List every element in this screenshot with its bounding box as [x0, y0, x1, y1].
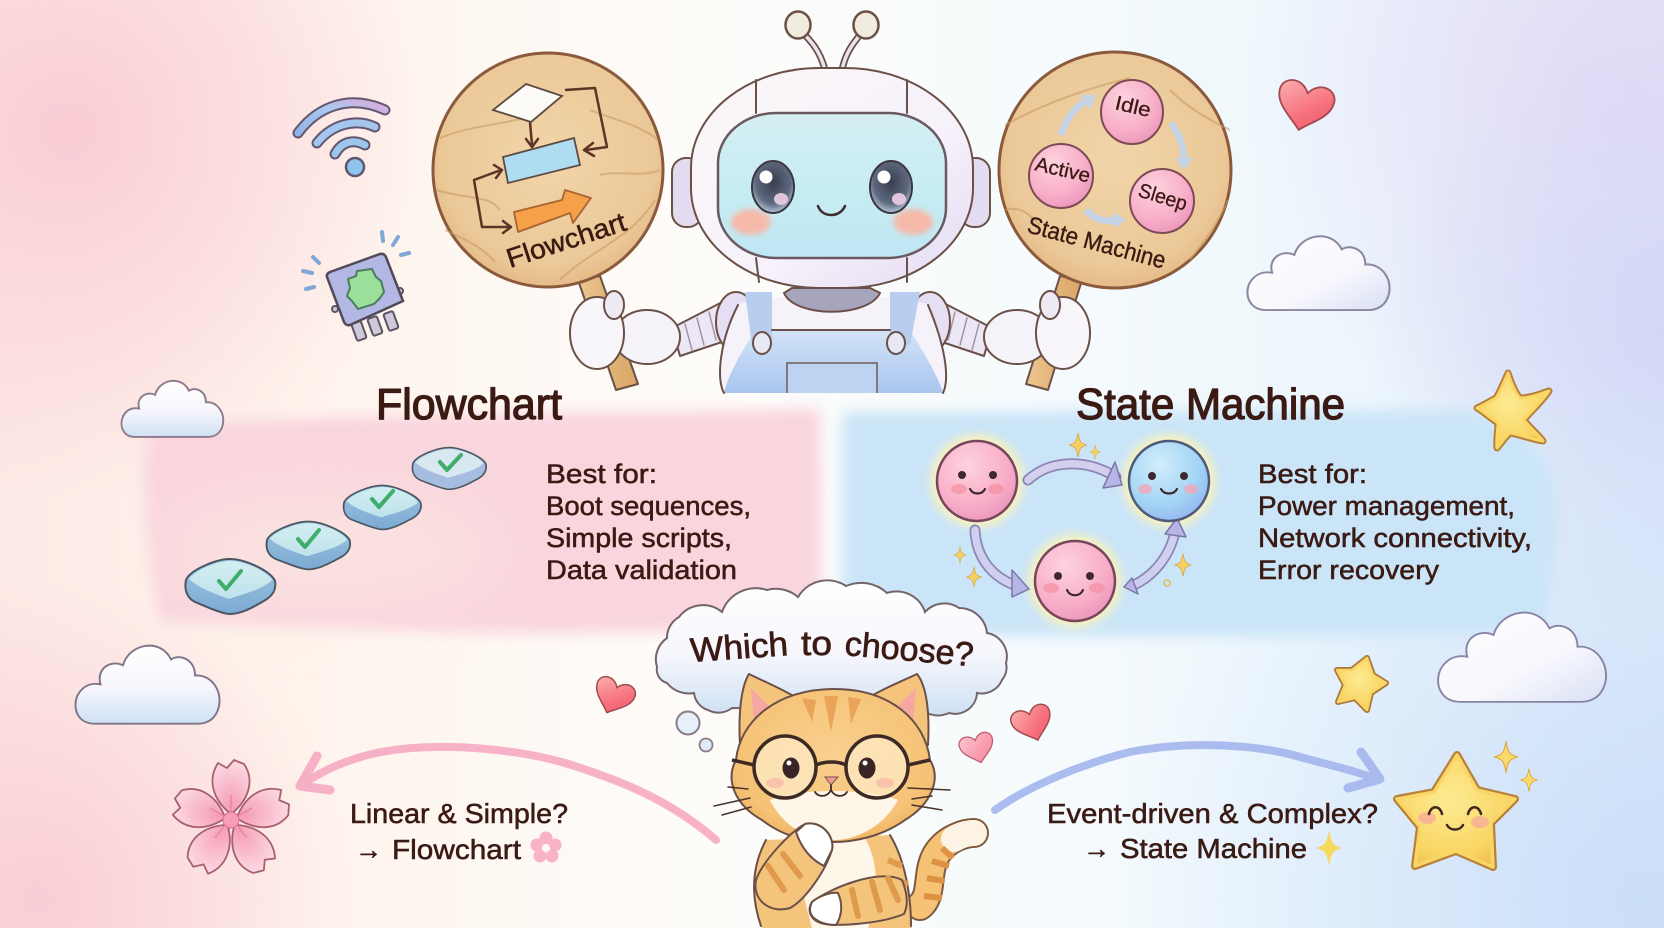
cloud left lower	[75, 646, 219, 724]
heading: state machine: State Machine	[1076, 380, 1345, 429]
state face pink 1	[937, 441, 1017, 521]
text: event driven	[1047, 798, 1378, 864]
icon: antennae	[786, 12, 878, 70]
cloud left middle	[121, 381, 223, 437]
text: event driven: Event-driven & Complex?	[1047, 798, 1378, 829]
text: flowchart best for: Best for:	[546, 459, 657, 489]
step 2	[267, 522, 350, 569]
flow diagram	[474, 84, 607, 233]
transition arrows	[975, 464, 1175, 587]
panel: state machine background	[842, 410, 1555, 637]
state diagram	[931, 433, 1215, 627]
text: event driven: →	[1083, 833, 1110, 864]
left arm and stick	[570, 276, 756, 390]
icon: big star top right	[1477, 373, 1549, 448]
text: event driven: State Machine	[1120, 833, 1307, 864]
heading: flowchart: Flowchart	[376, 380, 562, 429]
text: linear and simple: →	[355, 834, 382, 865]
cat muzzle	[770, 791, 898, 840]
cat	[714, 674, 974, 928]
sign: state machine: Active	[1033, 153, 1092, 187]
text: flowchart best for: Data validation	[546, 555, 737, 585]
cat paw raised	[755, 823, 832, 909]
icon: cherry blossom	[168, 760, 294, 879]
whiskers	[714, 787, 950, 815]
cloud right lower	[1438, 613, 1606, 702]
flowchart steps	[185, 447, 486, 614]
bubble text: to	[801, 625, 832, 663]
sign: flowchart	[433, 53, 663, 287]
right arm and stick	[910, 276, 1090, 390]
text: state machine best for: Best for:	[1258, 459, 1367, 489]
state labels: Idle	[1113, 92, 1153, 122]
helmet seams	[756, 80, 907, 282]
panel: flowchart background	[145, 409, 822, 633]
icon: small flower	[530, 832, 562, 862]
state face blue	[1129, 441, 1209, 521]
cat head	[732, 689, 935, 842]
sign label: Flowchart	[503, 207, 630, 274]
step 4	[412, 447, 486, 489]
robot	[570, 12, 1090, 393]
icon: microchip	[303, 232, 409, 341]
icon: small star	[1337, 658, 1386, 710]
face screen	[718, 113, 946, 258]
thought bubble	[656, 580, 1007, 752]
arrow: to flowchart	[300, 747, 716, 840]
cat tail	[920, 833, 974, 906]
cat body	[754, 835, 912, 928]
sparkles	[954, 433, 1192, 587]
text: flowchart best for: Simple scripts,	[546, 523, 732, 553]
icon: pink heart	[957, 731, 998, 767]
nose and mouth	[815, 777, 847, 796]
cat ears	[739, 674, 929, 745]
robot body with overalls	[720, 288, 946, 393]
sign: state machine: Sleep	[1136, 180, 1190, 215]
text: linear and simple: Linear & Simple?	[350, 798, 568, 829]
icon: left heart	[588, 674, 638, 720]
text: linear and simple	[350, 798, 568, 865]
text: state machine best for: Network connectivity,	[1258, 523, 1532, 553]
text: flowchart best for	[546, 459, 751, 585]
icon: inline sparkle	[1316, 830, 1342, 866]
text: state machine best for	[1258, 459, 1532, 585]
cloud top right	[1247, 236, 1389, 310]
icon: right heart	[1008, 702, 1057, 746]
icon: heart top right	[1271, 77, 1337, 137]
cat head stripes	[802, 696, 861, 732]
text: linear and simple: Flowchart	[392, 834, 521, 865]
glow	[931, 435, 1215, 627]
icon: smiling star	[1397, 741, 1538, 867]
cat cheeks	[766, 778, 894, 788]
step 1	[185, 559, 275, 614]
bubble text: Which	[689, 625, 789, 670]
bubble text	[689, 625, 975, 674]
robot face	[731, 161, 933, 235]
text: state machine best for: Error recovery	[1258, 555, 1440, 585]
step 3	[344, 485, 421, 529]
text: state machine best for: Power management,	[1258, 491, 1515, 521]
state arrows	[1061, 100, 1184, 221]
state face pink 2	[1035, 541, 1115, 621]
sign label: State Machine	[1024, 212, 1169, 275]
sign: state machine	[999, 52, 1231, 288]
arrow: to state machine	[995, 745, 1380, 810]
cat eyes	[782, 758, 876, 778]
icon: wifi	[298, 103, 385, 176]
ears	[672, 158, 990, 227]
glasses	[732, 736, 930, 798]
state bubbles	[1029, 80, 1194, 233]
text: flowchart best for: Boot sequences,	[546, 491, 751, 521]
bubble text: choose?	[843, 625, 975, 674]
helmet	[691, 68, 973, 288]
cat paw lower	[810, 876, 907, 925]
